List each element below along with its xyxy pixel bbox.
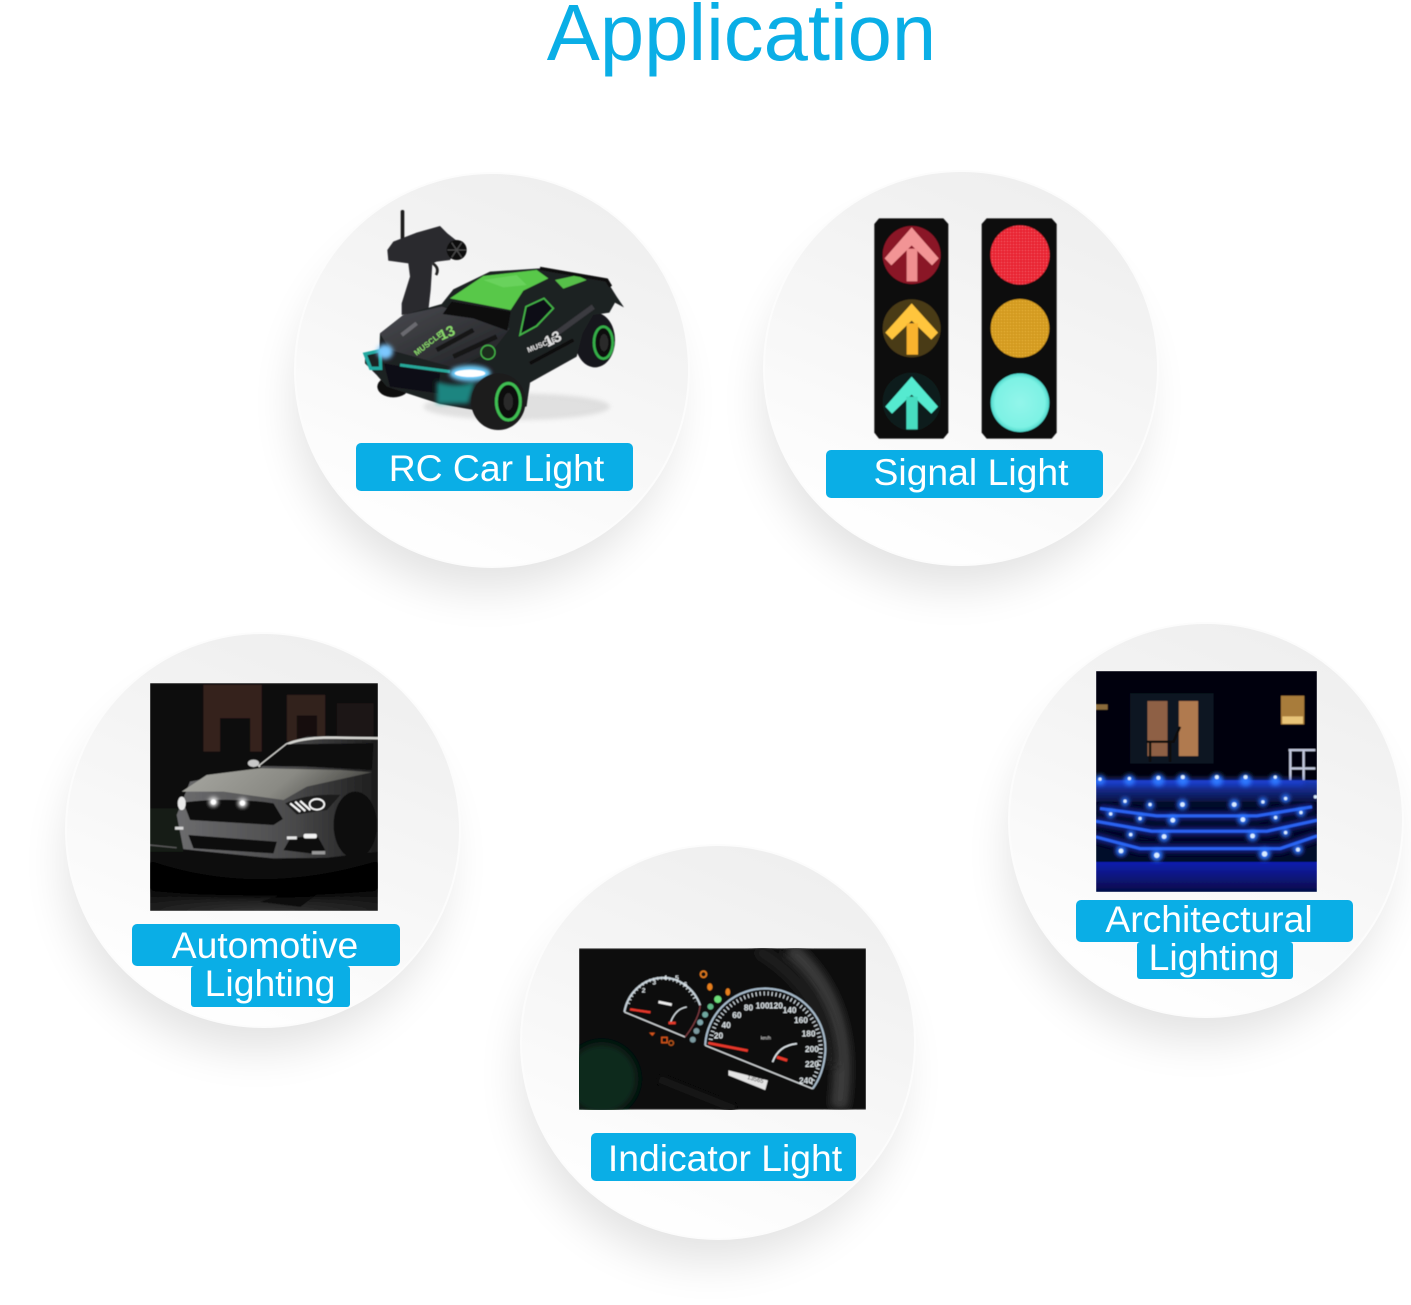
decal text: 13 — [436, 323, 458, 344]
photo: dashboard gauges: 2 — [642, 987, 646, 994]
label: Indicator Light: Indicator Light — [608, 1137, 843, 1179]
label: Architectural Lighting — [1076, 898, 1353, 979]
photo: dashboard gauges: 40 — [722, 1020, 731, 1030]
label: Signal Light: Signal Light — [874, 451, 1069, 493]
photo: dashboard gauges: 3 — [652, 980, 656, 987]
decal text: MUSCLE — [412, 329, 445, 358]
decal text — [412, 323, 565, 358]
round signal — [982, 218, 1057, 439]
label: Architectural Lighting: Architectural — [1105, 898, 1313, 940]
label: RC Car Light — [356, 443, 633, 491]
photo: dashboard gauges: 160 — [794, 1015, 808, 1025]
arrow signal — [874, 218, 948, 439]
label: Automotive Lighting: Lighting — [205, 962, 335, 1004]
photo: deck with blue LED lights — [1096, 671, 1317, 892]
photo: dashboard gauges: 240 — [799, 1075, 813, 1085]
photo: dashboard gauges: 4 — [663, 975, 667, 982]
photo: car at night — [150, 683, 378, 911]
photo: dashboard gauges: 180 — [802, 1028, 816, 1038]
photo: dashboard gauges: 60 — [732, 1010, 742, 1020]
photo: dashboard gauges — [579, 948, 866, 1110]
panel: RC car light — [295, 173, 689, 590]
panel: automotive lighting — [66, 633, 460, 1050]
panel: indicator light — [521, 845, 915, 1262]
panel: signal light — [764, 171, 1158, 588]
decal text: MUSCLE — [526, 335, 558, 355]
photo: dashboard gauges: 200 — [805, 1044, 819, 1054]
decal text: 13 — [542, 328, 565, 351]
photo: dashboard gauges: 5 — [675, 975, 679, 982]
photo: dashboard gauges: 6 — [683, 982, 687, 989]
icon: traffic lights — [874, 218, 1057, 439]
photo: dashboard gauges: 13565 — [746, 1075, 765, 1085]
photo: dashboard gauges: 20 — [714, 1031, 723, 1041]
label: RC Car Light: RC Car Light — [389, 447, 605, 489]
photo: dashboard gauges: 80 — [744, 1003, 754, 1013]
right gauge — [705, 989, 825, 1089]
label: Automotive Lighting — [132, 924, 400, 1007]
photo: dashboard gauges: 120 — [769, 1000, 783, 1010]
photo: dashboard gauges: 100 — [756, 1000, 770, 1010]
photo: dashboard gauges: km/h — [761, 1036, 771, 1041]
photo: dashboard gauges: 220 — [805, 1059, 819, 1069]
label: Automotive Lighting: Automotive — [172, 924, 358, 966]
indicator dots — [649, 971, 730, 1045]
icon: RC car with remote — [365, 210, 624, 430]
photo: dashboard gauges: 140 — [783, 1005, 797, 1015]
panel: architectural lighting — [1009, 623, 1403, 1040]
label: Architectural Lighting: Lighting — [1149, 936, 1279, 978]
label: Signal Light — [826, 450, 1103, 498]
left gauge — [624, 978, 700, 1037]
